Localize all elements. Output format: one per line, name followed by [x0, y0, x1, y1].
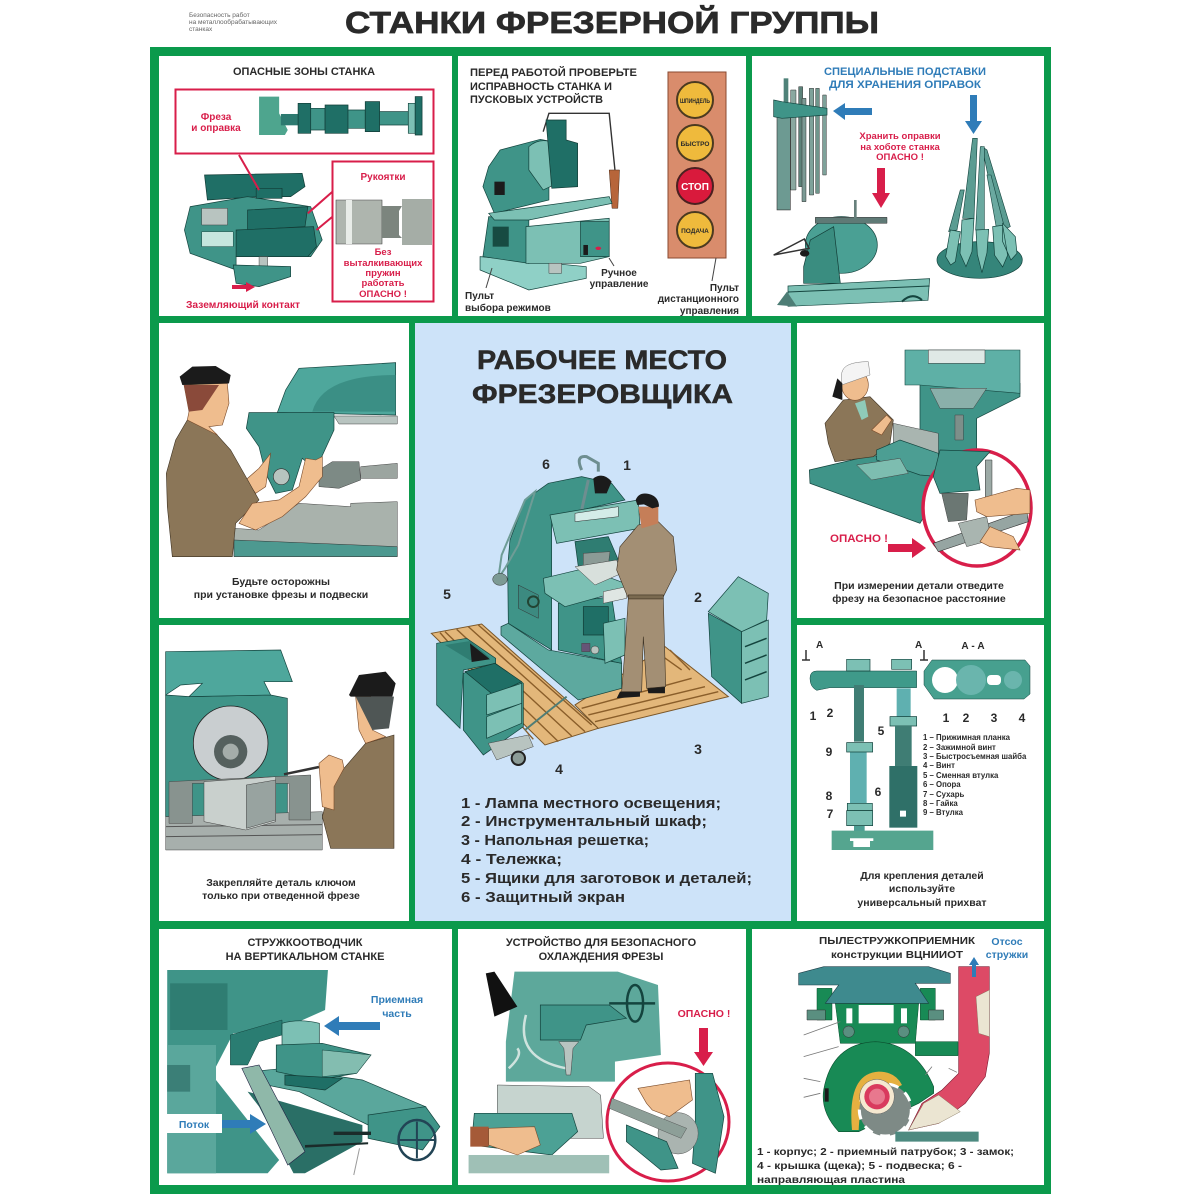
- arrow: red down: [694, 1028, 713, 1066]
- caption: используйте: [889, 883, 955, 895]
- caption: при установке фрезы и подвески: [194, 589, 368, 601]
- caption: [857, 870, 987, 909]
- section markers: А: [816, 640, 823, 651]
- grounding label: Заземляющий контакт: [186, 300, 300, 311]
- legend: 4 - Тележка;: [461, 851, 562, 868]
- callout: handles: выталкивающих: [344, 258, 423, 269]
- section markers: [802, 640, 928, 660]
- illustration: conical arbor stand: [937, 138, 1022, 278]
- heading: chip remover: СТРУЖКООТВОДЧИК: [247, 937, 363, 949]
- warning text: Хранить оправки: [859, 131, 941, 142]
- legend: 1 - Лампа местного освещения;: [461, 795, 721, 812]
- clamp parts legend: [923, 733, 1027, 817]
- green frame: [150, 47, 1051, 1194]
- label: remote control: управления: [680, 306, 739, 317]
- panel: dangerous zones: [159, 56, 452, 316]
- illustration: machine with coolant and hand: [469, 972, 661, 1173]
- workplace number labels: 3: [694, 741, 702, 757]
- workplace number labels: 2: [694, 589, 702, 605]
- remote control panel: ПОДАЧА: [681, 228, 709, 235]
- illustration: worker measuring part: [809, 350, 1020, 523]
- clamp number labels: [810, 706, 885, 821]
- caption: фрезу на безопасное расстояние: [832, 593, 1006, 605]
- warning text: ОПАСНО !: [876, 152, 924, 163]
- illustration: wall rack with arbors: [774, 78, 827, 210]
- clamp number labels: 9: [826, 745, 833, 759]
- workplace number labels: [443, 456, 702, 777]
- floor grating: [431, 624, 728, 745]
- warning label: ОПАСНО !: [678, 1008, 730, 1020]
- clamp parts legend: 7 – Сухарь: [923, 790, 965, 799]
- label: flow: [167, 1114, 266, 1134]
- heading: dangerous zones: ОПАСНЫЕ ЗОНЫ СТАНКА: [233, 66, 375, 78]
- grounding label: [186, 282, 300, 311]
- illustration: section A-A: 3: [991, 711, 998, 725]
- clamp parts legend: 8 – Гайка: [923, 799, 958, 808]
- clamp parts legend: 5 – Сменная втулка: [923, 771, 999, 780]
- heading: check before work: ИСПРАВНОСТЬ СТАНКА И: [470, 81, 612, 93]
- clamp number labels: 1: [810, 709, 817, 723]
- clamp number labels: 7: [827, 807, 834, 821]
- label: remote control: дистанционного: [658, 294, 739, 305]
- parts legend: 4 - крышка (щека); 5 - подвеска; 6 -: [757, 1160, 963, 1172]
- callout: handles: ОПАСНО !: [359, 289, 407, 300]
- caption: [194, 576, 368, 601]
- heading: check before work: [470, 66, 637, 106]
- legend: 2 - Инструментальный шкаф;: [461, 813, 707, 830]
- heading: check before work: ПУСКОВЫХ УСТРОЙСТВ: [470, 93, 603, 106]
- label: remote control: Пульт: [710, 283, 739, 294]
- illustration: section A-A: 2: [963, 711, 970, 725]
- panel: mandrel storage: [752, 56, 1044, 316]
- label: manual control: [590, 258, 649, 290]
- label: receiving part: Приемная: [371, 994, 423, 1006]
- caption: универсальный прихват: [857, 897, 987, 909]
- callout: cutter and arbor: Фреза: [201, 112, 232, 123]
- callout: cutter and arbor: и оправка: [191, 123, 241, 134]
- illustration: vertical milling machine: [480, 113, 620, 290]
- illustration: worker tightening vise: [166, 650, 396, 850]
- heading: collector: ПЫЛЕСТРУЖКОПРИЕМНИК: [819, 935, 976, 947]
- legend: [461, 795, 752, 906]
- workplace number labels: 1: [623, 457, 631, 473]
- label: remote control: [658, 258, 739, 317]
- arrow: suction: [969, 957, 979, 977]
- heading: chip remover: [226, 937, 384, 963]
- heading: storage stands: [824, 66, 986, 91]
- heading: collector: [819, 935, 976, 961]
- section markers: А: [915, 640, 922, 651]
- illustration: section A-A: 1: [943, 711, 950, 725]
- caption: [202, 877, 360, 902]
- title: СТАНКИ ФРЕЗЕРНОЙ ГРУППЫ: [345, 4, 879, 40]
- small header note: станках: [189, 26, 213, 33]
- callout: cutter and arbor: [176, 90, 434, 154]
- small header note: [189, 11, 278, 33]
- heading: cooling device: УСТРОЙСТВО ДЛЯ БЕЗОПАСНОГО: [506, 936, 697, 949]
- clamp parts legend: 9 – Втулка: [923, 808, 964, 817]
- panel: check before work: [458, 56, 746, 317]
- illustration: section A-A: [924, 641, 1030, 725]
- label: suction: стружки: [986, 949, 1028, 961]
- remote control panel: ШПИНДЕЛЬ: [680, 99, 711, 105]
- clamp number labels: 8: [826, 789, 833, 803]
- arrow: red right: [888, 538, 926, 558]
- callout: handles: работать: [362, 278, 405, 289]
- caption: только при отведенной фрезе: [202, 890, 360, 902]
- heading: collector: конструкции ВЦНИИОТ: [831, 949, 964, 961]
- caption: Будьте осторожны: [232, 576, 330, 588]
- label: mode selector: выбора режимов: [465, 302, 551, 314]
- clamp parts legend: 6 – Опора: [923, 780, 961, 789]
- heading: cooling device: ОХЛАЖДЕНИЯ ФРЕЗЫ: [539, 951, 664, 963]
- panel: fix part with wrench: [159, 625, 409, 921]
- heading: workplace: РАБОЧЕЕ МЕСТО: [477, 345, 727, 375]
- legend: 5 - Ящики для заготовок и деталей;: [461, 870, 752, 887]
- label: suction: [986, 936, 1028, 961]
- clamp number labels: 5: [878, 724, 885, 738]
- heading: workplace: ФРЕЗЕРОВЩИКА: [472, 379, 733, 409]
- remote control panel: СТОП: [681, 182, 709, 193]
- label: mode selector: [465, 268, 551, 314]
- clamp parts legend: 3 – Быстросъемная шайба: [923, 752, 1027, 761]
- illustration: workplace: [431, 456, 768, 765]
- panel: install cutter carefully: [159, 323, 409, 618]
- legend: 6 - Защитный экран: [461, 889, 625, 906]
- arrow: red down: [872, 168, 890, 208]
- callout: handles: пружин: [365, 268, 401, 279]
- parts legend: направляющая пластина: [757, 1174, 905, 1186]
- label: receiving part: [324, 994, 423, 1036]
- illustration: section A-A: 4: [1019, 711, 1026, 725]
- panel: chip remover: [159, 929, 452, 1185]
- heading: storage stands: ДЛЯ ХРАНЕНИЯ ОПРАВОК: [829, 79, 981, 91]
- heading: workplace: [472, 345, 733, 409]
- label: manual control: управление: [590, 279, 649, 290]
- illustration: vertical machine with chute: [167, 970, 440, 1175]
- illustration: collector cross-section: [799, 967, 989, 1142]
- heading: cooling device: [506, 936, 697, 963]
- caption: [832, 580, 1006, 605]
- small header note: на металлообрабатывающих: [189, 18, 278, 26]
- workplace number labels: 4: [555, 761, 563, 777]
- small header note: Безопасность работ: [189, 11, 250, 19]
- warning text: [859, 131, 941, 163]
- workplace number labels: 5: [443, 586, 451, 602]
- heading: check before work: ПЕРЕД РАБОТОЙ ПРОВЕРЬТЕ: [470, 66, 637, 79]
- inset: danger detail: [923, 450, 1031, 566]
- heading: storage stands: СПЕЦИАЛЬНЫЕ ПОДСТАВКИ: [824, 66, 986, 78]
- clamp number labels: 2: [827, 706, 834, 720]
- panel: dust and chip collector: [752, 929, 1044, 1186]
- remote control panel: БЫСТРО: [681, 141, 709, 148]
- warning label: ОПАСНО !: [830, 533, 888, 545]
- warning text: на хоботе станка: [860, 142, 940, 153]
- caption: При измерении детали отведите: [834, 580, 1004, 592]
- label: suction: Отсос: [991, 936, 1023, 948]
- panel: workplace of milling operator: [415, 323, 791, 921]
- parts legend: 1 - корпус; 2 - приемный патрубок; 3 - замок;: [757, 1146, 1014, 1158]
- clamp number labels: 6: [875, 785, 882, 799]
- arrow: blue left: [833, 103, 872, 120]
- clamp parts legend: 1 – Прижимная планка: [923, 733, 1011, 742]
- label: manual control: Ручное: [601, 268, 637, 279]
- label: mode selector: Пульт: [465, 291, 494, 302]
- illustration: milling machine with danger pointers: [184, 155, 333, 287]
- panel: safe cooling device: [458, 929, 746, 1185]
- illustration: section A-A: А - А: [961, 641, 985, 652]
- caption: Для крепления деталей: [860, 870, 984, 882]
- illustration: machine with arbor on arm: [774, 200, 930, 307]
- callout: handles: Без: [375, 247, 392, 258]
- clamp parts legend: 4 – Винт: [923, 761, 955, 770]
- label: receiving part: часть: [382, 1008, 412, 1020]
- parts legend: [757, 1146, 1014, 1186]
- workplace number labels: 6: [542, 456, 550, 472]
- arrow: blue down: [965, 95, 982, 134]
- panel: measuring part: [797, 323, 1044, 618]
- label: flow: Поток: [179, 1119, 210, 1131]
- callout: handles: Рукоятки: [361, 172, 405, 183]
- remote control panel: [668, 72, 726, 258]
- clamp parts legend: 2 – Зажимной винт: [923, 743, 996, 752]
- panel: universal clamp: [797, 625, 1044, 921]
- heading: chip remover: НА ВЕРТИКАЛЬНОМ СТАНКЕ: [226, 951, 384, 963]
- caption: Закрепляйте деталь ключом: [206, 877, 356, 889]
- inset: danger detail: [607, 1063, 729, 1181]
- legend: 3 - Напольная решетка;: [461, 832, 649, 849]
- callout: handles: [332, 162, 434, 302]
- illustration: clamp side view: [810, 659, 933, 850]
- illustration: worker installing cutter: [166, 363, 397, 557]
